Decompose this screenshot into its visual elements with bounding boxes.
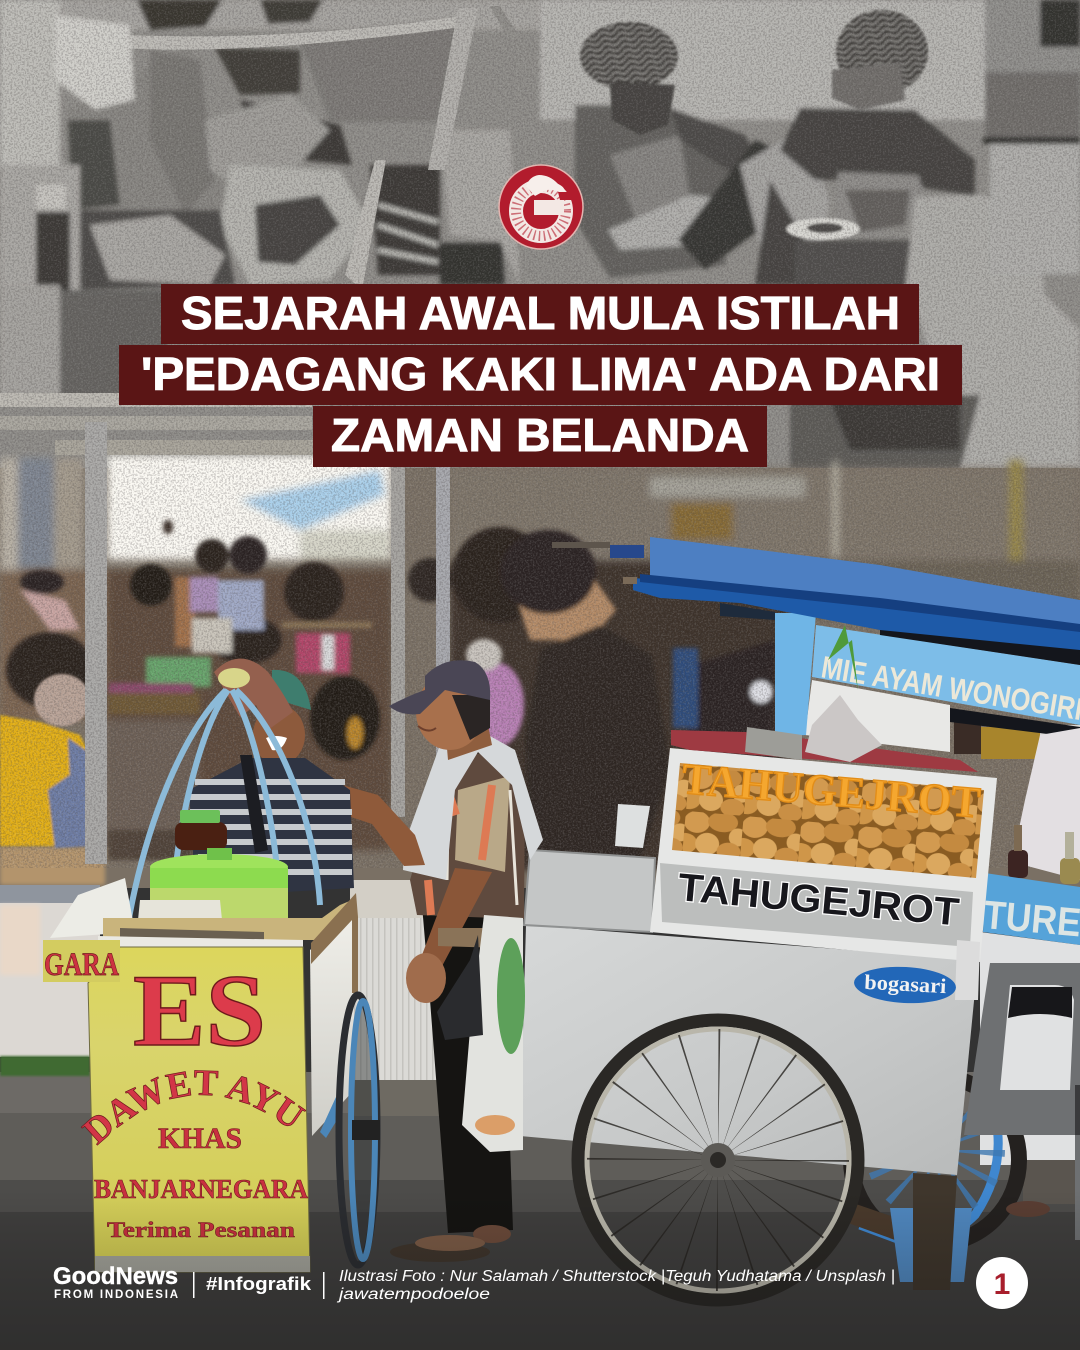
black bag <box>437 935 483 1040</box>
background blue cart with tarp <box>552 537 1080 759</box>
woman in yellow dress <box>0 674 93 848</box>
tape strip at corner <box>955 940 980 1000</box>
eagle head <box>526 175 565 196</box>
scaffold posts of market stall <box>0 393 450 864</box>
gara sticker <box>43 940 120 983</box>
cart side box <box>524 850 655 932</box>
page number badge: 1 <box>994 1268 1010 1301</box>
es dawet cart <box>43 810 380 1272</box>
title line 2: 'PEDAGANG KAKI LIMA' ADA DARI <box>141 348 940 400</box>
folded tarp <box>552 537 1080 650</box>
hand <box>406 953 446 1003</box>
white trim <box>98 936 303 950</box>
blue bucket <box>890 1208 972 1282</box>
bottom edge of board <box>95 1256 310 1272</box>
gara sticker: GARA <box>44 947 119 983</box>
page number badge <box>976 1257 1028 1309</box>
bag orange print <box>475 1115 515 1135</box>
white cup <box>615 804 650 848</box>
turban heads <box>580 10 928 240</box>
green dawet container <box>150 848 288 918</box>
carrying pole <box>43 6 540 290</box>
dark slats <box>120 928 264 940</box>
teal cap <box>272 670 311 710</box>
stone wall base <box>1023 1160 1080 1204</box>
pale wall and pavement behind carts <box>0 880 520 1116</box>
background: market crowd photo <box>0 455 1080 888</box>
cart: tahu gejrot <box>520 695 997 1290</box>
photo credit <box>337 1268 895 1303</box>
reaching arm <box>325 783 425 866</box>
shirt tan chest panel <box>455 776 510 872</box>
patterned cloth on head <box>214 658 293 730</box>
green leaf <box>828 625 858 690</box>
brand logo text: GoodNews <box>53 1263 178 1290</box>
wooden cart top <box>103 900 352 940</box>
hair <box>452 695 490 740</box>
striped shirt <box>189 758 354 892</box>
jar <box>175 810 227 850</box>
wooden cart leg <box>913 1173 957 1290</box>
plastic bag on roof <box>805 695 882 762</box>
ring gap <box>558 192 572 200</box>
road and kerb <box>0 1072 1080 1350</box>
display case frame <box>650 748 997 962</box>
dawet cart wheel <box>339 995 380 1265</box>
head <box>416 674 484 750</box>
brand logo text: FROM INDONESIA <box>54 1289 178 1301</box>
spare wheel <box>851 1076 1019 1244</box>
title line 1: SEJARAH AWAL MULA ISTILAH <box>181 287 900 339</box>
plastic stool <box>964 963 1080 1240</box>
shirt orange stripes <box>428 785 492 915</box>
divider two <box>323 1272 324 1299</box>
bag print <box>497 938 525 1054</box>
foot <box>415 1235 485 1251</box>
neck <box>445 725 492 760</box>
bogasari label <box>853 964 957 1006</box>
banjarnegara: BANJARNEGARA <box>94 1174 308 1204</box>
black lettering: TAHUGEJROT <box>676 866 961 935</box>
wooden handle <box>438 928 500 948</box>
title line 3: ZAMAN BELANDA <box>331 409 749 461</box>
shirt white stripes <box>447 790 517 905</box>
trousers <box>422 905 522 1233</box>
ornamented ring <box>516 186 566 236</box>
baseball cap <box>389 660 490 714</box>
cart side panel <box>310 912 354 1136</box>
yellow signboard <box>43 940 310 1272</box>
film grain over both photos <box>0 0 1080 868</box>
vendor man behind es cart <box>189 658 354 892</box>
face <box>253 705 305 765</box>
ES: ES <box>133 954 266 1068</box>
rear foot <box>473 1225 511 1243</box>
background: vintage photo of street vendors <box>0 0 1080 480</box>
bottom dark gradient <box>0 1190 1080 1350</box>
hashtag: #Infografik <box>206 1274 312 1294</box>
smile <box>418 726 436 731</box>
tissue bundle <box>138 900 222 920</box>
cart body <box>520 925 978 1175</box>
orange lettering: TAHUGEJROT <box>680 754 982 827</box>
grey cloth on roof <box>745 727 802 760</box>
footer <box>53 1257 1028 1309</box>
plastic cups bundle <box>50 878 135 938</box>
lower metal panel <box>660 863 973 947</box>
terima pesanan: Terima Pesanan <box>107 1217 295 1242</box>
arched blue hoops with cloth <box>126 668 320 935</box>
striped shirt <box>410 750 525 919</box>
red cloth on cart roof <box>671 730 978 772</box>
tofu window <box>672 763 984 878</box>
large spoked wheel <box>578 1020 858 1300</box>
teeth <box>266 736 287 750</box>
lower arm <box>422 868 492 970</box>
plastic cups bag <box>462 915 523 1152</box>
photo credit: jawatempodoeloe <box>337 1286 490 1303</box>
person in black jacket <box>500 530 775 860</box>
shoulder towel <box>403 736 543 880</box>
vendor standing man <box>325 660 543 1262</box>
strap <box>240 755 268 853</box>
bare foot <box>1006 1201 1050 1217</box>
logo badge <box>499 165 583 249</box>
letter G bar <box>534 200 564 215</box>
khas: KHAS <box>158 1122 242 1155</box>
divider one <box>193 1272 194 1298</box>
bogasari label: bogasari <box>864 970 947 998</box>
sandal <box>390 1242 490 1262</box>
shirt stripes <box>190 782 352 872</box>
background wheel and stool at right <box>840 963 1080 1282</box>
wooden edge <box>311 893 358 993</box>
blue strut <box>320 1097 337 1138</box>
photo credit: Ilustrasi Foto : Nur Salamah / Shutterstock |Teguh Yudhatama / Unsplash | <box>339 1268 895 1285</box>
title banner <box>119 284 962 467</box>
dawet ayu: DAWET AYU <box>80 1070 306 1146</box>
person in white far right with bottles <box>980 728 1080 1165</box>
wooden beam <box>840 1203 917 1248</box>
